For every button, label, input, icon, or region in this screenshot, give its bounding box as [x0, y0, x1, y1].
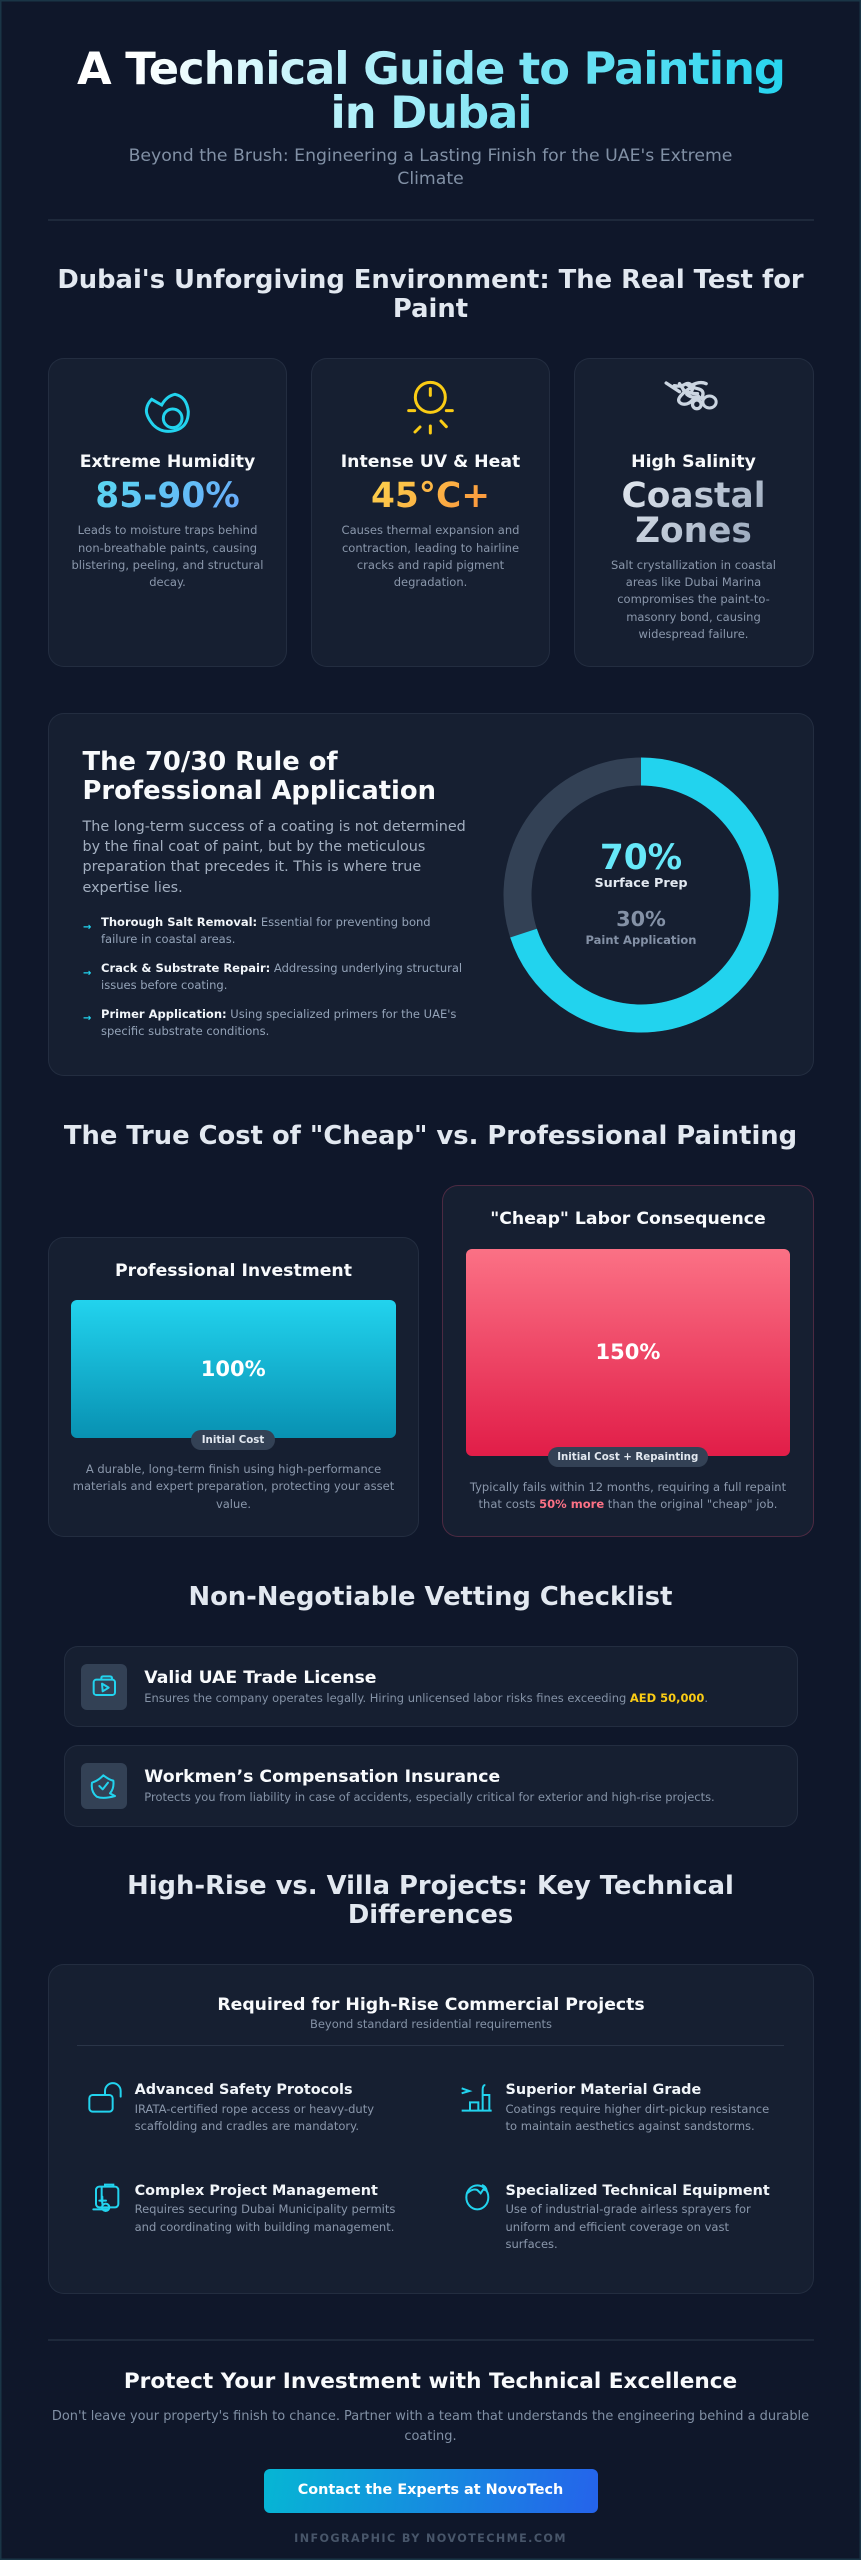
list item: salt removal	[83, 915, 431, 946]
button: contact	[264, 2469, 598, 2513]
panel: 70/30 rule	[48, 713, 814, 1076]
card description: Leads to moisture traps behind	[78, 523, 257, 537]
bar: 150%	[466, 1249, 790, 1456]
card title: "Cheap" Labor Consequence	[490, 1209, 766, 1229]
description	[470, 1480, 786, 1511]
intro text: expertise lies.	[82, 880, 183, 896]
list item: primer: →	[83, 1013, 91, 1024]
card description: blistering, peeling, and structural	[72, 558, 264, 572]
pill: initial cost plus repainting	[548, 1447, 708, 1467]
panel: intense UV and heat	[311, 358, 550, 667]
item title: Valid UAE Trade License	[144, 1668, 376, 1688]
heading: environment: Paint	[393, 294, 468, 324]
intro text	[82, 819, 466, 896]
list item: salt removal: →	[83, 922, 91, 932]
icon: salt crystals	[664, 380, 718, 410]
stat value: Coastal	[622, 476, 765, 516]
intro text: by the final coat of paint, but by the meticulous	[82, 839, 425, 855]
subtitle: Climate	[397, 168, 464, 188]
card description: areas like Dubai Marina	[626, 575, 761, 589]
icon: sprayer	[465, 2184, 490, 2210]
panel: professional investment	[48, 1237, 419, 1537]
checklist item: trade license	[64, 1646, 798, 1727]
call to action text	[52, 2408, 809, 2444]
item: material grade	[461, 2082, 769, 2133]
list item: salt removal: failure in coastal areas.	[101, 932, 235, 946]
panel subtitle: Beyond standard residential requirements	[310, 2017, 552, 2031]
heading: true cost: The True Cost of "Cheap" vs. Professional Painting	[64, 1121, 797, 1151]
heading: checklist: Non-Negotiable Vetting Checklist	[188, 1582, 672, 1612]
bar: 100%	[71, 1300, 396, 1438]
stat value	[622, 476, 765, 551]
card title: Professional Investment	[115, 1261, 352, 1281]
call to action heading: Protect Your Investment with Technical Excellence	[124, 2369, 737, 2394]
item text	[135, 2202, 395, 2234]
card description	[342, 523, 519, 589]
value: 70%: 70%	[600, 838, 682, 878]
checklist item: insurance	[64, 1745, 798, 1827]
item title: Advanced Safety Protocols	[135, 2082, 353, 2098]
card description: contraction, leading to hairline	[342, 541, 519, 555]
card description: widespread failure.	[639, 627, 748, 641]
subtitle: Beyond the Brush: Engineering a Lasting Finish for the UAE's Extreme	[129, 146, 732, 166]
icon: open lock	[88, 2082, 122, 2113]
item text	[506, 2202, 751, 2251]
bar value: 150%	[596, 1340, 660, 1364]
icon: building chart	[461, 2084, 492, 2112]
panel title: Required for High-Rise Commercial Projects	[217, 1995, 645, 2015]
bar value: 100%	[201, 1357, 266, 1381]
label: surface prep: Surface Prep	[594, 876, 688, 891]
panel: extreme humidity	[48, 358, 287, 667]
item text: surfaces.	[506, 2237, 558, 2251]
list item: substrate repair: Crack & Substrate Repair: Addressing underlying structural	[101, 961, 462, 975]
card description	[611, 558, 776, 641]
call to action text: Don't leave your property's finish to chance. Partner with a team that understands the engineering behind a durable	[52, 2408, 809, 2424]
pill: initial cost	[191, 1430, 275, 1450]
title: in Dubai	[330, 86, 532, 139]
item: technical equipment	[465, 2183, 770, 2251]
description: Typically fails within 12 months, requiring a full repaint	[470, 1480, 786, 1494]
card description: degradation.	[394, 575, 467, 589]
list item: primer: specific substrate conditions.	[101, 1024, 269, 1038]
item text: Requires securing Dubai Municipality permits	[135, 2202, 395, 2216]
card title: High Salinity	[631, 452, 756, 472]
item text: and coordinating with building management.	[135, 2220, 394, 2234]
item: project management	[92, 2183, 395, 2234]
item title: Complex Project Management	[135, 2183, 378, 2199]
item text	[506, 2102, 769, 2133]
description: materials and expert preparation, protecting your asset	[73, 1479, 394, 1493]
icon: clipboard valve	[92, 2184, 120, 2212]
item text: to maintain aesthetics against sandstorms.	[506, 2119, 755, 2133]
card description: decay.	[149, 575, 186, 589]
title: A Technical Guide to Painting	[77, 42, 785, 95]
list item: substrate repair: issues before coating.	[101, 978, 227, 992]
item text: IRATA-certified rope access or heavy-duty	[135, 2102, 374, 2116]
panel: high-rise requirements	[48, 1964, 814, 2294]
heading: The 70/30 Rule of	[82, 747, 338, 777]
call to action text: coating.	[404, 2428, 457, 2444]
list item: primer	[83, 1006, 456, 1038]
subtitle	[129, 146, 732, 188]
heading: environment	[57, 265, 804, 324]
description: A durable, long-term finish using high-performance	[86, 1462, 381, 1476]
heading: high-rise vs villa	[127, 1871, 734, 1930]
icon: humidity drop	[144, 392, 190, 433]
icon box: license	[81, 1664, 127, 1710]
item text: Protects you from liability in case of accidents, especially critical for exterior and high-rise projects.	[144, 1790, 715, 1804]
panel: high salinity	[574, 358, 814, 667]
heading: high-rise vs villa: Differences	[348, 1900, 513, 1930]
item text: uniform and efficient coverage on vast	[506, 2220, 729, 2234]
card title: Intense UV & Heat	[341, 452, 520, 472]
item text: Ensures the company operates legally. Hiring unlicensed labor risks fines exceeding AED 50,000.	[144, 1691, 708, 1705]
card description: non-breathable paints, causing	[78, 541, 257, 555]
list item: salt removal: Thorough Salt Removal: Essential for preventing bond	[101, 915, 431, 929]
pill: initial cost: Initial Cost	[202, 1434, 264, 1446]
item title: Specialized Technical Equipment	[506, 2183, 770, 2199]
description: value.	[216, 1497, 251, 1511]
label: paint application: Paint Application	[585, 933, 696, 947]
item: safety protocols	[88, 2082, 374, 2133]
intro text: preparation that precedes it. This is where true	[82, 859, 421, 875]
description	[73, 1462, 394, 1511]
item title: Superior Material Grade	[506, 2082, 701, 2098]
list item: substrate repair	[83, 961, 462, 992]
title	[77, 42, 785, 139]
stat value: 45°C+	[371, 476, 490, 516]
pill: initial cost plus repainting: Initial Cost + Repainting	[557, 1451, 698, 1463]
icon: sun	[407, 380, 454, 434]
stat value: Zones	[635, 511, 752, 551]
card description: cracks and rapid pigment	[357, 558, 504, 572]
card description: Causes thermal expansion and	[342, 523, 519, 537]
item text: Coatings require higher dirt-pickup resistance	[506, 2102, 769, 2116]
footer credit: INFOGRAPHIC BY NOVOTECHME.COM	[294, 2532, 567, 2545]
card description: Salt crystallization in coastal	[611, 558, 776, 572]
card description: masonry bond, causing	[626, 610, 761, 624]
card description	[72, 523, 264, 589]
intro text: The long-term success of a coating is not determined	[82, 819, 466, 835]
list item: substrate repair: →	[83, 968, 91, 978]
icon box: shield	[81, 1763, 127, 1809]
item title: Workmen’s Compensation Insurance	[144, 1767, 500, 1787]
value: 30%: 30%	[616, 907, 666, 931]
heading: Professional Application	[82, 776, 436, 806]
item text: scaffolding and cradles are mandatory.	[135, 2119, 359, 2133]
heading: environment: Dubai's Unforgiving Environment: The Real Test for	[57, 265, 804, 295]
panel: cheap labor consequence	[442, 1185, 814, 1537]
item text: Use of industrial-grade airless sprayers for	[506, 2202, 751, 2216]
card title: Extreme Humidity	[80, 452, 255, 472]
stat value: 85-90%	[95, 476, 240, 516]
heading: high-rise vs villa: High-Rise vs. Villa Projects: Key Technical	[127, 1871, 734, 1901]
list item: primer: Primer Application: Using specialized primers for the UAE's	[101, 1006, 456, 1020]
description: that costs 50% more than the original "cheap" job.	[479, 1497, 777, 1511]
button: contact: Contact the Experts at NovoTech	[298, 2482, 563, 2498]
item text	[135, 2102, 374, 2133]
donut chart: 70/30 split	[504, 758, 778, 1032]
heading	[82, 747, 436, 806]
card description: compromises the paint-to-	[617, 592, 770, 606]
